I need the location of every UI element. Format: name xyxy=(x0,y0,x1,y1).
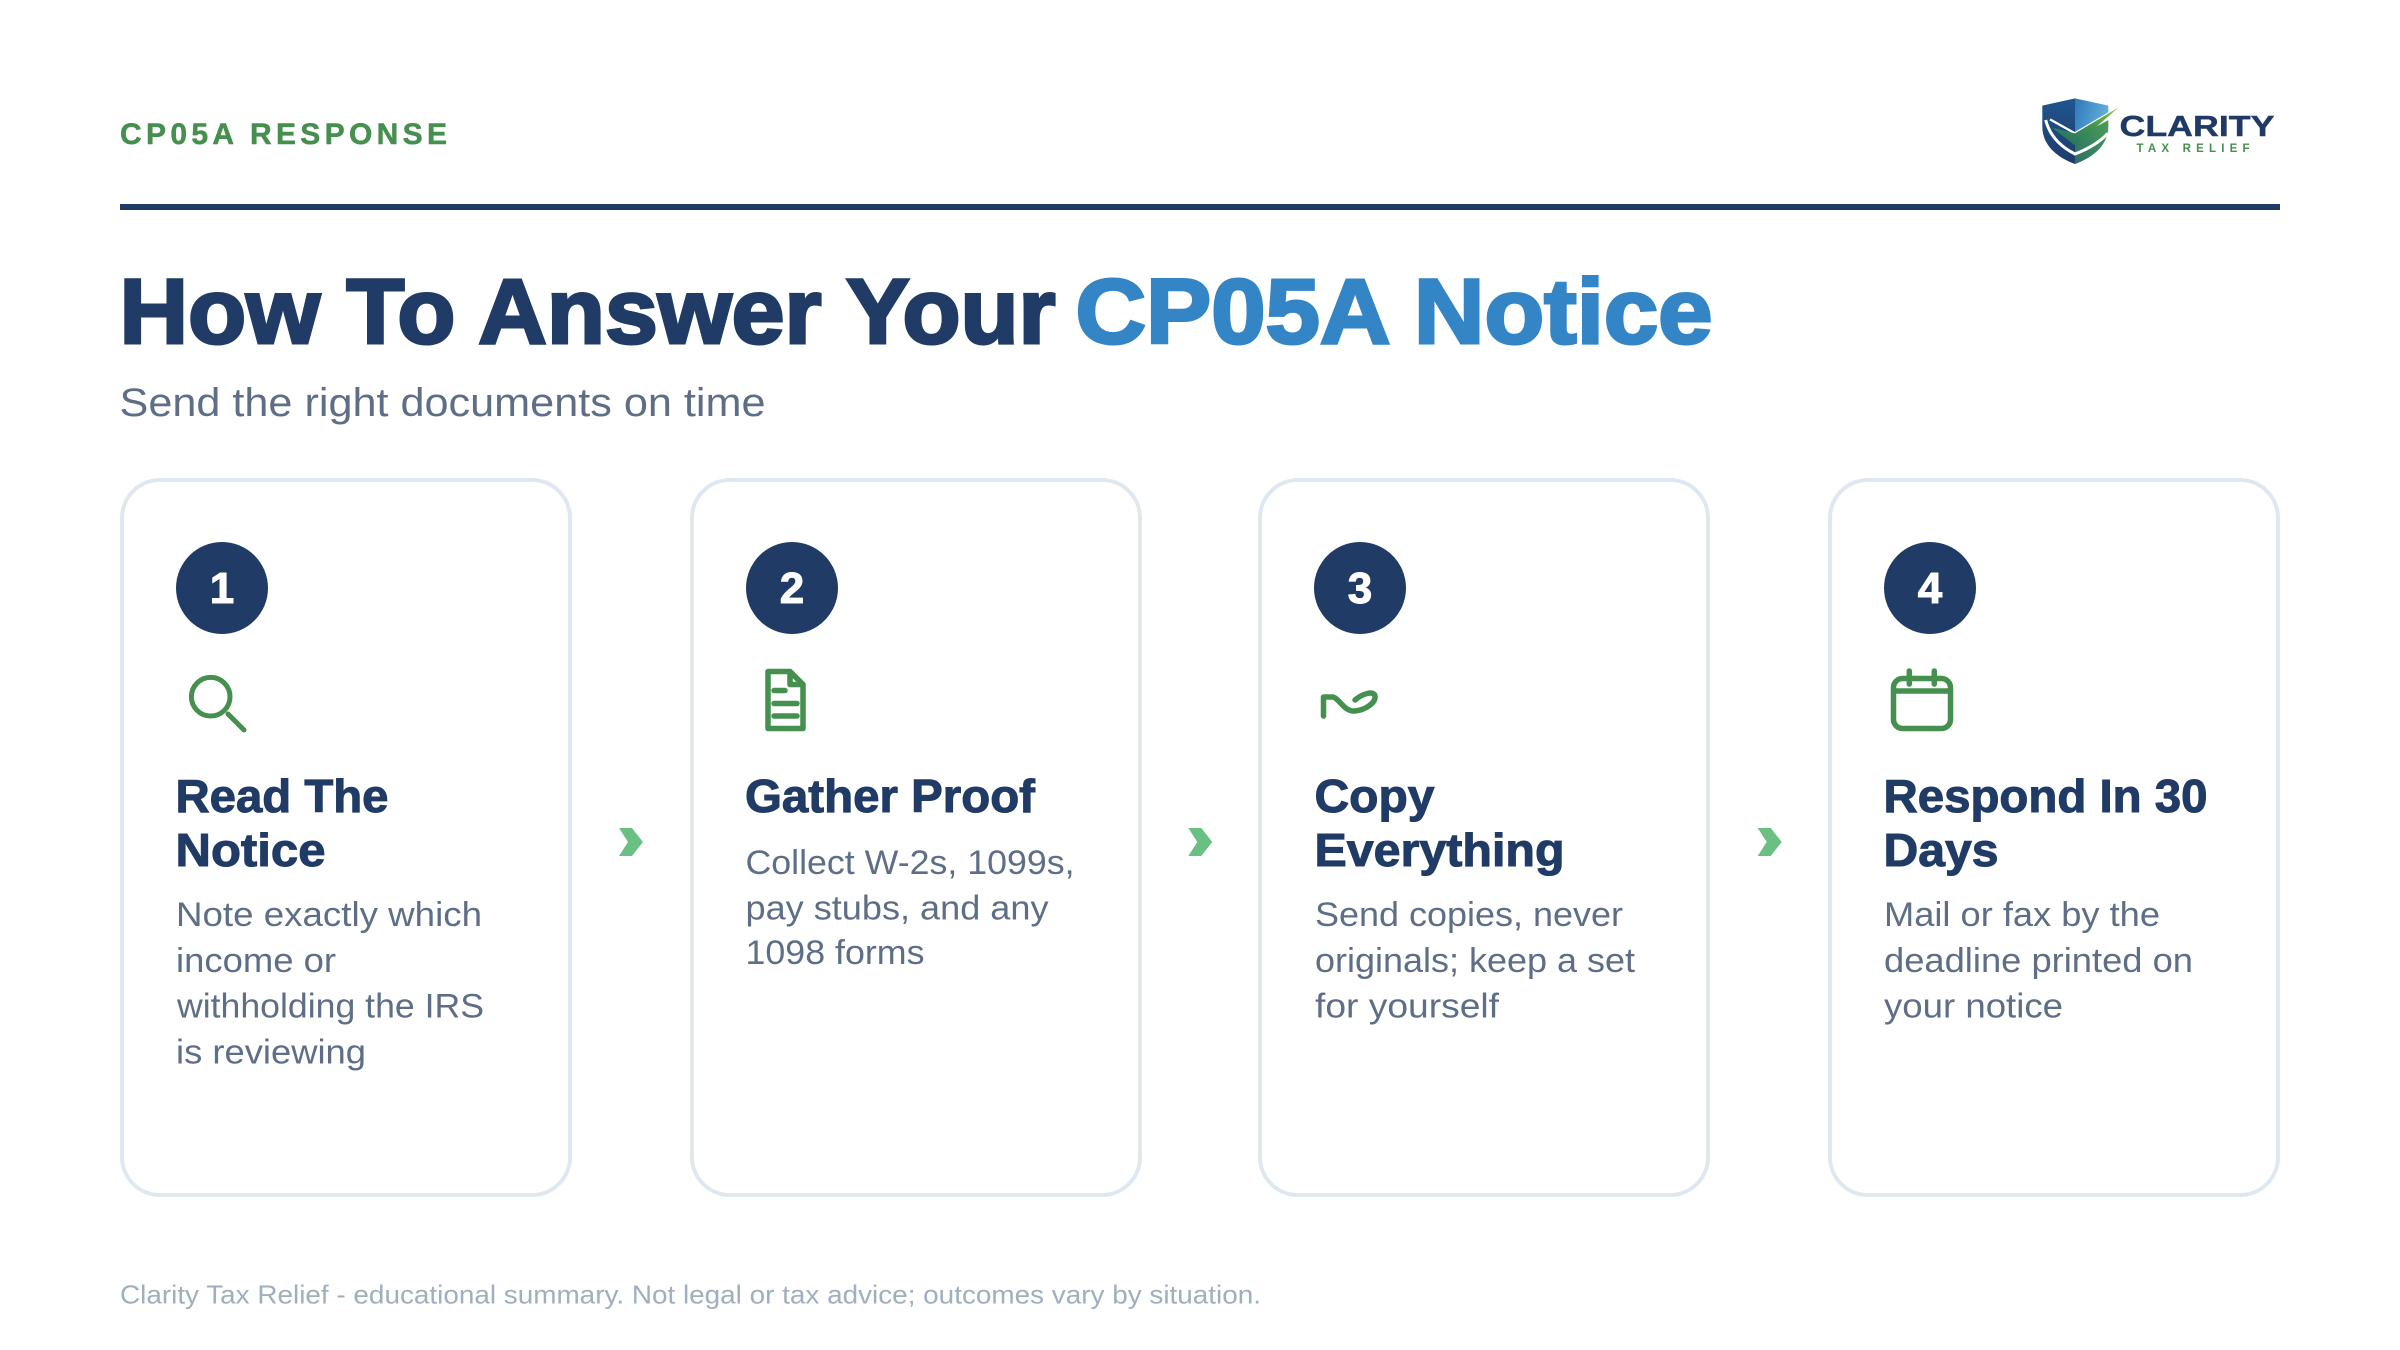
card outline xyxy=(122,480,570,1195)
body text: withholding the IRS xyxy=(176,988,484,1026)
step number 1 xyxy=(176,542,268,634)
heading: Days xyxy=(1884,824,1998,876)
heading xyxy=(176,770,388,876)
arrow: step 3 to 4 xyxy=(1758,828,1782,856)
card outline xyxy=(1260,480,1708,1195)
step number 3: 3 xyxy=(1348,564,1372,613)
body text: Mail or fax by the xyxy=(1884,896,2160,934)
panel: step 4 xyxy=(1830,480,2278,1195)
step number 4: 4 xyxy=(1918,564,1943,613)
heading: Notice xyxy=(176,824,326,876)
body text xyxy=(1315,896,1636,1026)
step number 2 xyxy=(746,542,838,634)
step number 3 xyxy=(1314,542,1406,634)
card outline xyxy=(692,480,1140,1195)
arrow: step 2 to 3 xyxy=(1188,828,1212,856)
panel: step 2 xyxy=(692,480,1140,1195)
logo tagline: TAX RELIEF xyxy=(2136,143,2250,155)
step number 4 xyxy=(1884,542,1976,634)
body text: Send copies, never xyxy=(1315,896,1623,934)
icon: document xyxy=(768,672,803,728)
body text: for yourself xyxy=(1315,988,1500,1026)
title: How To Answer Your xyxy=(120,261,1056,363)
heading: Copy xyxy=(1314,770,1435,822)
icon: calendar xyxy=(1894,671,1950,728)
icon: magnifying glass xyxy=(191,677,244,730)
body text xyxy=(1884,896,2193,1026)
title xyxy=(120,261,1712,363)
step number 2: 2 xyxy=(780,564,804,613)
body text: deadline printed on xyxy=(1884,942,2193,980)
logo wordmark: CLARITY xyxy=(2120,111,2274,143)
eyebrow label: CP05A RESPONSE xyxy=(120,118,447,151)
heading: Respond In 30 xyxy=(1884,770,2208,822)
step number 1: 1 xyxy=(210,564,234,613)
body text: originals; keep a set xyxy=(1315,942,1636,980)
icon: shield with check xyxy=(2042,98,2119,164)
body text xyxy=(746,844,1074,972)
heading xyxy=(1884,770,2208,876)
arrow: step 1 to 2 xyxy=(619,828,643,856)
title: CP05A Notice xyxy=(1076,261,1712,363)
card outline xyxy=(1830,480,2278,1195)
body text: Note exactly which xyxy=(176,896,482,934)
body text: Collect W-2s, 1099s, xyxy=(746,844,1074,882)
icon: signature xyxy=(1324,693,1375,716)
body text: 1098 forms xyxy=(746,934,924,972)
subtitle: Send the right documents on time xyxy=(120,381,766,425)
body text: pay stubs, and any xyxy=(746,890,1048,928)
panel: step 1 xyxy=(122,480,570,1195)
body text: is reviewing xyxy=(176,1034,366,1072)
heading xyxy=(1314,770,1564,876)
footer disclaimer: Clarity Tax Relief - educational summary. Not legal or tax advice; outcomes vary by situation. xyxy=(120,1280,1261,1310)
panel: step 3 xyxy=(1260,480,1708,1195)
logo: Clarity Tax Relief xyxy=(2042,98,2274,164)
body text: your notice xyxy=(1884,988,2063,1026)
body text xyxy=(176,896,484,1072)
heading: Gather Proof xyxy=(745,770,1036,822)
heading: Everything xyxy=(1314,824,1564,876)
heading: Read The xyxy=(176,770,388,822)
body text: income or xyxy=(176,942,336,980)
